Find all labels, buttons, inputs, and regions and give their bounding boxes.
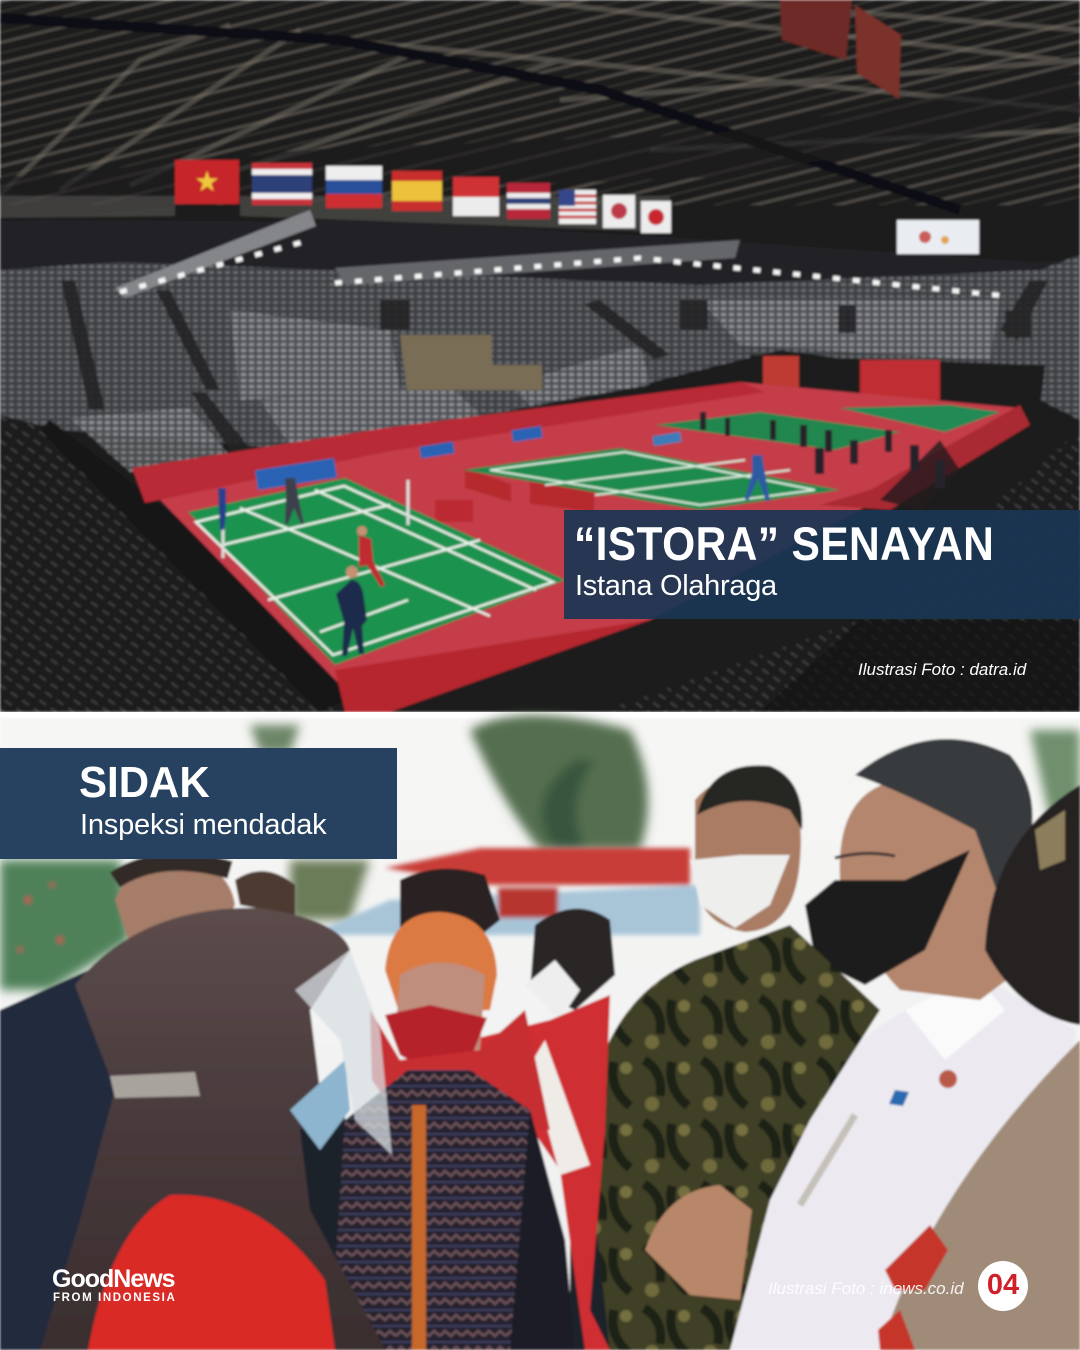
woman brown hijab with face shield (40, 908, 392, 1350)
left man dark suit (0, 860, 295, 1350)
callout: Istora Senayan (564, 510, 1080, 619)
near court (188, 478, 565, 665)
palms (250, 715, 1080, 850)
heading: Sidak: SIDAK (79, 758, 210, 807)
callout: Sidak (0, 748, 397, 859)
right lower seats (600, 430, 1080, 712)
upper wall band (0, 220, 1080, 300)
photo: inspection (0, 715, 1080, 1350)
flags (175, 160, 671, 233)
foliage mid (290, 860, 370, 920)
lights rig (115, 210, 1005, 298)
lighter seat blocks (70, 300, 1000, 472)
subheading: Inspeksi mendadak: Inspeksi mendadak (80, 809, 326, 841)
hands (645, 1185, 752, 1300)
heading: Istora Senayan: “ISTORA” SENAYAN (574, 517, 994, 570)
page number badge (978, 1261, 1028, 1311)
caption: photo credit datra.id: Ilustrasi Foto : datra.id (858, 660, 1026, 679)
caption: photo credit inews.co.id: Ilustrasi Foto : inews.co.id (768, 1279, 964, 1298)
woman in orange hijab (330, 912, 575, 1350)
arena roof (0, 0, 1080, 210)
players (218, 412, 960, 656)
stands (0, 255, 1080, 450)
flags: ★ (194, 165, 220, 198)
banners on ceiling (780, 0, 901, 99)
man in white shirt, far right (730, 739, 1075, 1350)
back black wall (745, 355, 1045, 410)
left lower seats (0, 415, 340, 712)
photo: badminton arena (0, 0, 1080, 712)
left foliage (0, 860, 130, 990)
man in batik (585, 765, 880, 1350)
background dark filler between figures (300, 1100, 620, 1350)
subheading: Istana Olahraga: Istana Olahraga (575, 570, 777, 602)
gas station canopy (320, 848, 700, 935)
red floor (132, 382, 1020, 690)
red board front/back (132, 382, 765, 503)
aisles and stairs (61, 280, 1048, 452)
right foreground officer (878, 785, 1080, 1350)
scoreboard (897, 220, 979, 254)
logo: GoodNews (52, 1265, 175, 1293)
sponsor boards (255, 426, 682, 522)
logo: FROM INDONESIA (53, 1292, 176, 1304)
white gap between photos (0, 712, 1080, 718)
man background red (400, 869, 615, 1350)
page number badge: 04 (987, 1269, 1019, 1301)
central tan block (400, 335, 542, 390)
far courts (463, 405, 1000, 510)
